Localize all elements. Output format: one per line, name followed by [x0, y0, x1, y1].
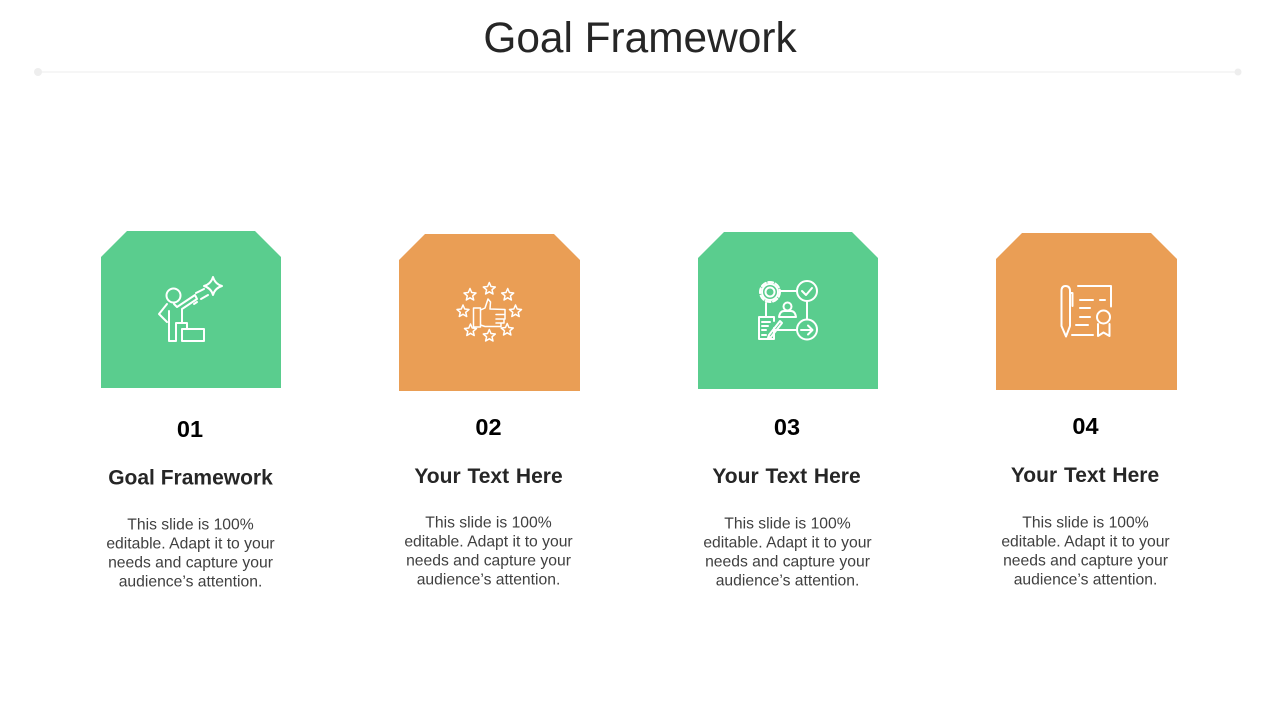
text block 03: editable. Adapt it to your: [703, 534, 872, 552]
heading 03: Your Text Here: [712, 465, 861, 488]
text block 01: needs and capture your: [108, 554, 273, 572]
text block 03: This slide is 100%: [724, 516, 851, 532]
text block 01: audience’s attention.: [119, 574, 262, 590]
text block 01: editable. Adapt it to your: [106, 536, 275, 552]
card shape: orange 02: [399, 234, 580, 391]
icon: person reaching for star: [159, 277, 222, 341]
text block 04: This slide is 100%: [1022, 514, 1149, 532]
card shape: green 03: [698, 232, 878, 389]
text block 04: editable. Adapt it to your: [1001, 534, 1170, 550]
icon: thumbs up with stars: [457, 282, 522, 341]
text block 02: needs and capture your: [406, 552, 571, 570]
text block 02: editable. Adapt it to your: [404, 534, 573, 550]
text block 02: audience’s attention.: [417, 572, 560, 588]
number 03: 03: [774, 414, 800, 440]
text block 03: audience’s attention.: [716, 572, 859, 590]
icon: process cycle with person: [759, 281, 817, 340]
text block 01: This slide is 100%: [127, 516, 254, 534]
text block 03: needs and capture your: [705, 554, 870, 570]
heading 04: Your Text Here: [1011, 464, 1159, 487]
title: Goal Framework: [483, 14, 797, 61]
text block 04: needs and capture your: [1003, 552, 1168, 570]
panel: step 02: [399, 234, 580, 588]
panel: step 04: [996, 233, 1177, 588]
icon: document with pen and ribbon: [1062, 286, 1111, 336]
number 04: 04: [1072, 413, 1099, 439]
card shape: orange 04: [996, 233, 1177, 390]
text block 02: This slide is 100%: [425, 514, 552, 532]
number 02: 02: [475, 414, 502, 440]
panel: step 03: [698, 232, 878, 590]
panel: step 01: [101, 231, 281, 590]
heading 02: Your Text Here: [414, 465, 563, 488]
number 01: 01: [177, 416, 203, 442]
text block 04: audience’s attention.: [1014, 572, 1157, 588]
card shape: green 01: [101, 231, 281, 388]
heading 01: Goal Framework: [108, 466, 273, 490]
